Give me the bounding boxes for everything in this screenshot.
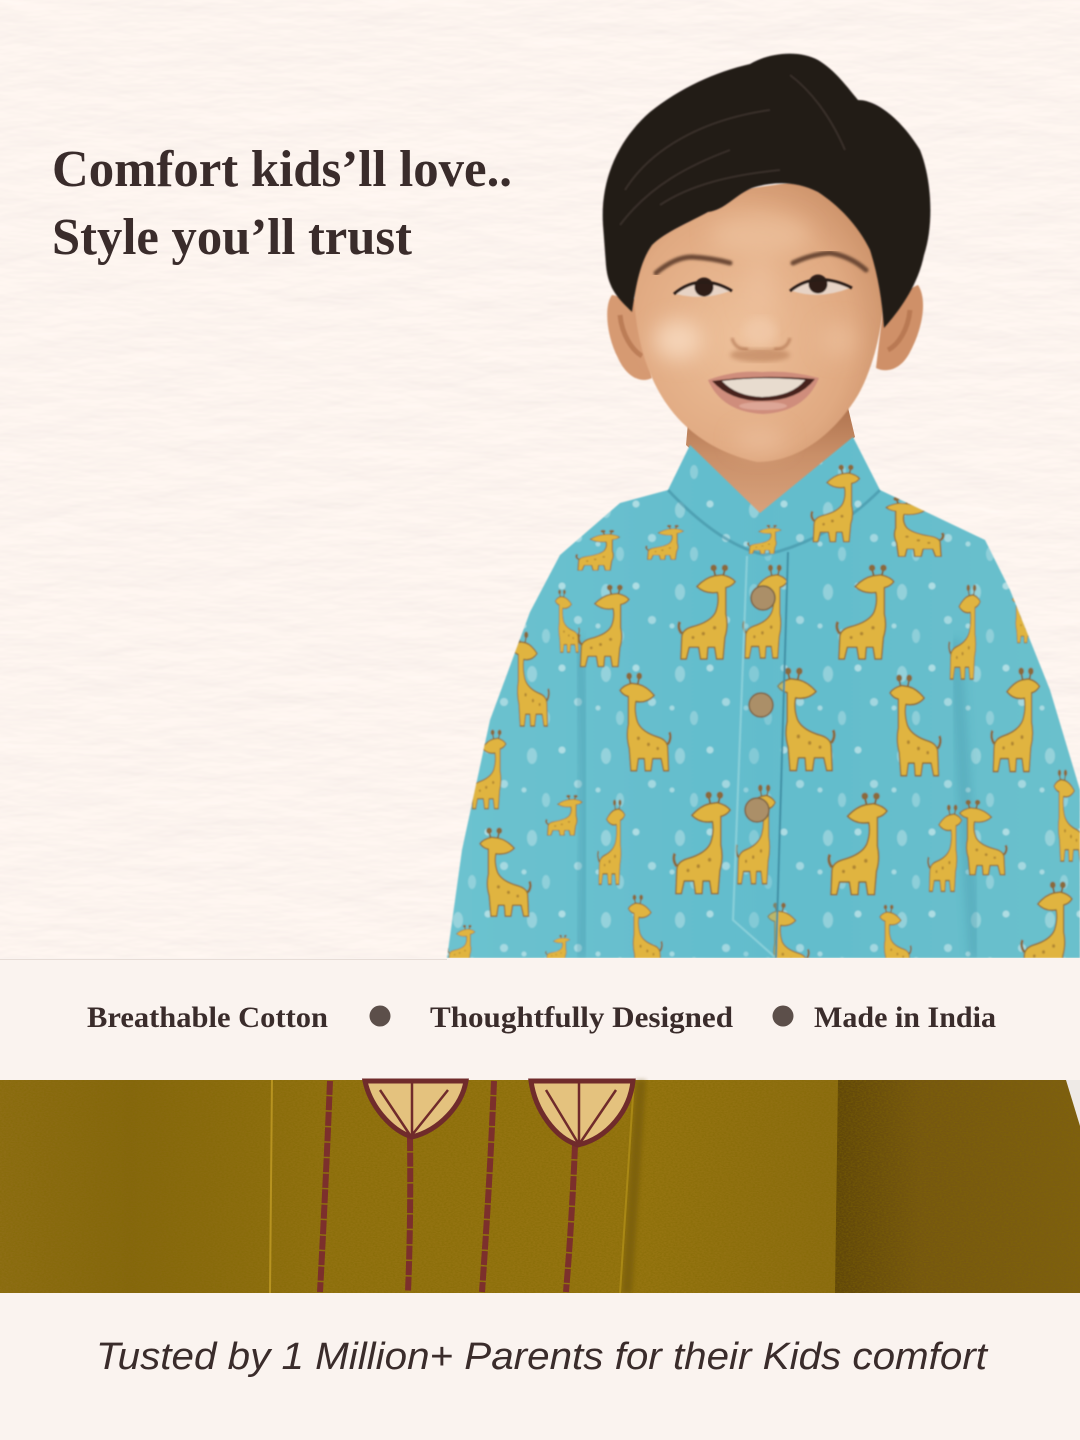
embroidered leaf [365,1081,466,1137]
hair [603,54,930,328]
hero heading [52,141,512,266]
ears [607,285,923,380]
brows [656,253,866,273]
bullet dot [772,1006,794,1026]
hero heading: Comfort kids’ll love.. [52,141,512,198]
teal kurta with giraffe print [440,430,1080,980]
smile [708,372,819,414]
feature: thoughtfully designed: Thoughtfully Designed [430,1001,733,1034]
hero heading: Style you’ll trust [52,209,413,266]
embroidered stems [320,1081,575,1292]
cheek highlights [654,215,856,452]
nose [730,317,790,362]
photo: smiling boy in giraffe-print kurta [440,54,1080,980]
face [634,180,886,462]
panel: feature strip [0,958,1080,1080]
bullet dot [370,1006,390,1026]
feature: breathable cotton: Breathable Cotton [87,1001,328,1034]
panel: trust strip [0,1293,1080,1440]
white background corner [1066,1080,1080,1126]
eyes [674,274,852,297]
embroidered leaf [531,1081,633,1145]
trust statement: Tusted by 1 Million+ Parents for their Kids comfort [96,1336,989,1378]
neck [686,395,855,515]
photo: mustard embroidered fabric close-up [0,1080,1080,1293]
wooden buttons [745,586,775,822]
button placket [733,552,788,958]
feature: made in India: Made in India [814,1001,996,1034]
